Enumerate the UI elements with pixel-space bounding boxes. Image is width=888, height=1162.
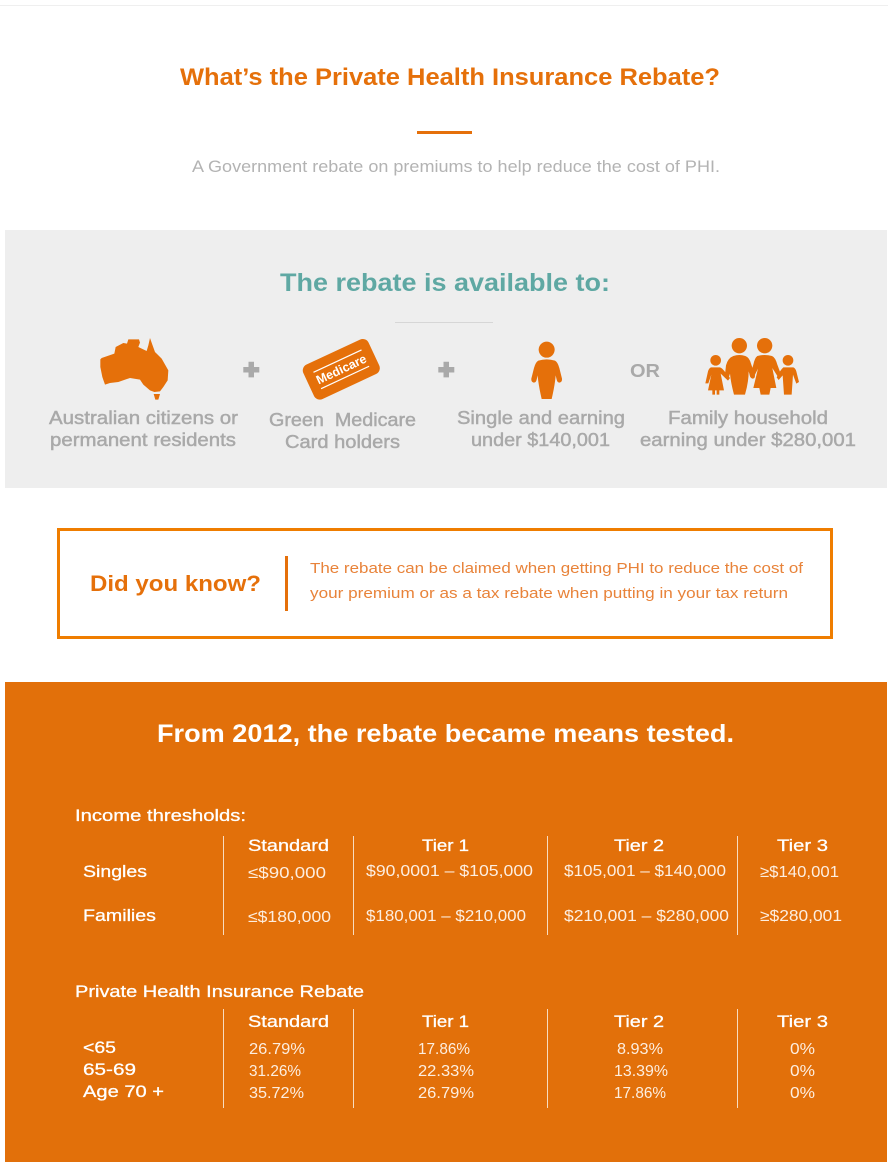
table: rebate percentages: 26.79%: [249, 1041, 305, 1058]
label: families: Family household: [668, 408, 828, 428]
table: rebate percentages: 8.93%: [617, 1041, 663, 1058]
table: income thresholds: Tier 3: [777, 836, 828, 855]
table: rebate percentages: [75, 982, 828, 1108]
icon: Medicare card: [301, 337, 382, 402]
table: rebate percentages: Private Health Insurance Rebate: [75, 982, 364, 1001]
table: rebate percentages: 0%: [790, 1085, 815, 1102]
table: rebate percentages: 22.33%: [418, 1063, 474, 1080]
table: income thresholds: ≤$90,000: [248, 865, 326, 882]
label: families: [640, 408, 856, 450]
table: rebate percentages: 0%: [790, 1041, 815, 1058]
title: What’s the Private Health Insurance Rebate?: [180, 64, 720, 91]
table: income thresholds: Families: [83, 906, 156, 925]
icon: single person: [531, 342, 562, 399]
table: rebate percentages: 17.86%: [614, 1085, 666, 1102]
table: income thresholds: $210,001 – $280,000: [564, 908, 729, 925]
table: income thresholds: Income thresholds:: [75, 806, 246, 825]
label: citizens: permanent residents: [50, 430, 236, 450]
table: income thresholds: ≤$180,000: [248, 909, 331, 926]
icon: Medicare card: Medicare: [314, 352, 369, 387]
table: rebate percentages: 65-69: [83, 1060, 136, 1079]
table: income thresholds: [75, 806, 842, 935]
table: rebate percentages: 13.39%: [614, 1063, 668, 1080]
table: income thresholds: Tier 1: [422, 836, 469, 855]
table: rebate percentages: <65: [83, 1038, 116, 1057]
label: families: earning under $280,001: [640, 430, 856, 450]
panel: rebate eligibility: [5, 230, 887, 488]
table: income thresholds: $90,0001 – $105,000: [366, 863, 533, 880]
table: income thresholds: ≥$140,001: [760, 864, 839, 881]
icon: Australia map: [100, 338, 168, 400]
icon: plus: [438, 362, 454, 377]
table: rebate percentages: Standard: [248, 1012, 329, 1031]
callout heading: Did you know?: [90, 571, 261, 596]
callout: did you know: [58, 530, 832, 638]
subtitle: A Government rebate on premiums to help reduce the cost of PHI.: [192, 158, 720, 176]
table: income thresholds: $180,001 – $210,000: [366, 908, 526, 925]
table: rebate percentages: 0%: [790, 1063, 815, 1080]
label: singles: Single and earning: [457, 408, 625, 428]
icon: family: [705, 338, 799, 395]
table: rebate percentages: 31.26%: [249, 1063, 301, 1080]
table: income thresholds: Tier 2: [614, 836, 664, 855]
table: income thresholds: ≥$280,001: [760, 908, 842, 925]
label: Medicare holders: [269, 410, 416, 452]
icon: plus: [243, 362, 259, 377]
label: Medicare holders: Green Medicare: [269, 410, 416, 430]
label: singles: [457, 408, 625, 450]
label: Medicare holders: Card holders: [285, 432, 400, 452]
label: citizens: Australian citizens or: [49, 408, 238, 428]
label: singles: under $140,001: [471, 430, 610, 450]
callout text: [310, 561, 804, 602]
table: rebate percentages: 35.72%: [249, 1085, 304, 1102]
table: rebate percentages: 26.79%: [418, 1085, 474, 1102]
table: rebate percentages: Tier 1: [422, 1012, 469, 1031]
eligibility heading: The rebate is available to:: [280, 269, 610, 297]
table: income thresholds: Singles: [83, 862, 147, 881]
table: rebate percentages: Tier 3: [777, 1012, 828, 1031]
table: rebate percentages: Age 70 +: [83, 1082, 164, 1101]
panel: means testing: [5, 682, 887, 1162]
means testing heading: From 2012, the rebate became means tested.: [157, 720, 734, 748]
table: income thresholds: $105,001 – $140,000: [564, 863, 726, 880]
callout text: The rebate can be claimed when getting PHI to reduce the cost of: [310, 561, 804, 577]
text: OR: OR: [630, 361, 660, 381]
callout text: your premium or as a tax rebate when putting in your tax return: [310, 586, 788, 602]
table: rebate percentages: 17.86%: [418, 1041, 470, 1058]
table: rebate percentages: Tier 2: [614, 1012, 664, 1031]
label: citizens: [49, 408, 238, 450]
table: income thresholds: Standard: [248, 836, 329, 855]
